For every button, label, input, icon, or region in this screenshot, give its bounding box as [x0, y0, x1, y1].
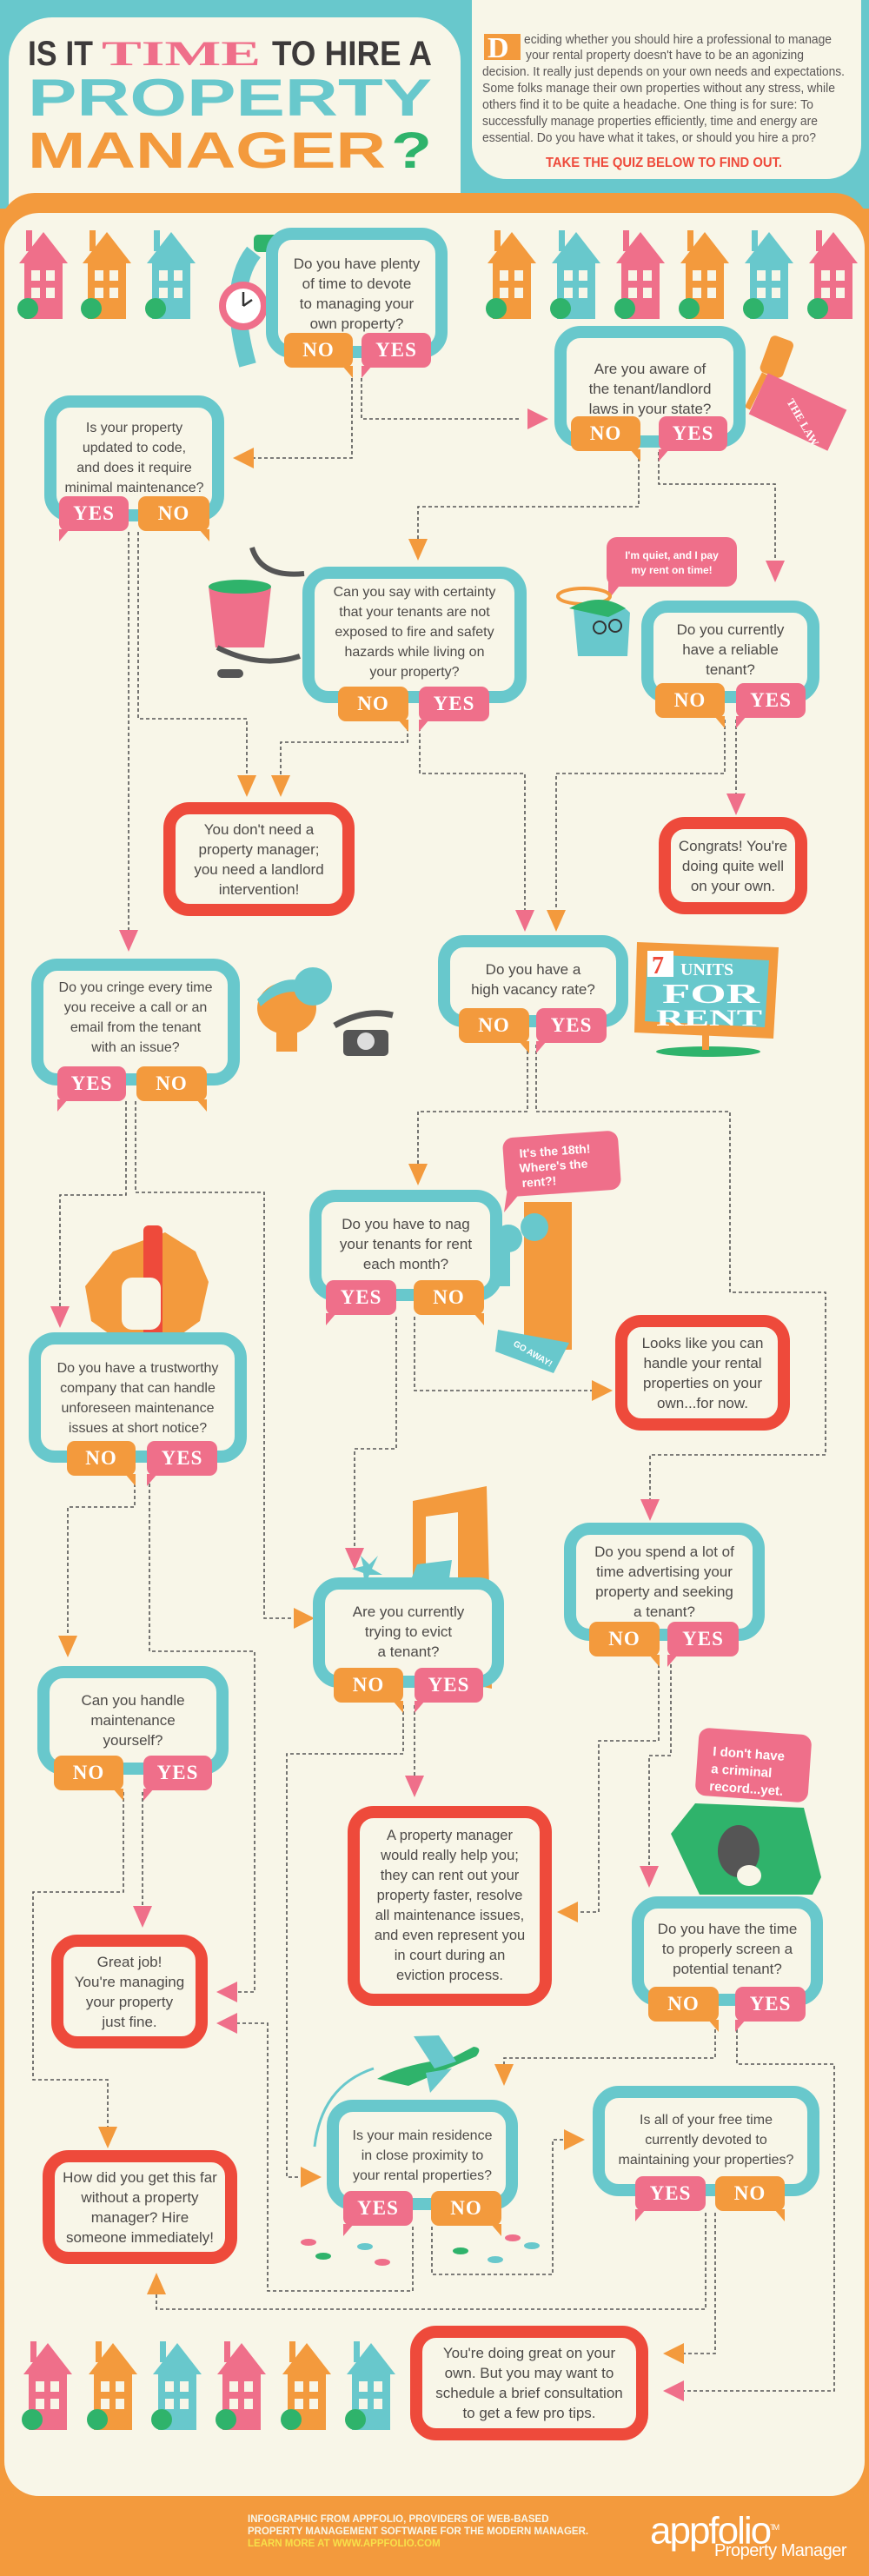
result: hire someone immediately: manager? Hire — [91, 2209, 189, 2225]
question 5 — [641, 601, 819, 703]
question 15: Is all of your free time — [640, 2113, 773, 2128]
question 7 — [438, 935, 628, 1027]
question 1: Do you have plenty — [294, 256, 420, 272]
question 1 — [266, 228, 448, 358]
question 4: Can you say with certainty — [334, 585, 495, 600]
question 2: Are you aware of — [594, 361, 706, 377]
intro text: D — [488, 32, 509, 64]
title: MANAGER — [28, 123, 386, 179]
Q8 buttons: NO — [433, 1286, 465, 1308]
result: great job: just fine. — [102, 2013, 157, 2030]
question 7: Do you have a — [486, 961, 580, 978]
icon: worried lady with phone — [257, 967, 393, 1056]
question 15: maintaining your properties? — [619, 2153, 793, 2168]
intro text: TAKE THE QUIZ BELOW TO FIND OUT. — [546, 156, 782, 170]
question 14 — [327, 2100, 518, 2210]
result: handle on your own for now: Looks like you can — [642, 1335, 763, 1351]
result: doing great, consult pro: own. But you may want to — [445, 2365, 614, 2381]
question 5: Do you currently — [677, 621, 784, 638]
title: PROPERTY — [28, 69, 432, 127]
Q12 buttons — [54, 1756, 212, 1801]
Q6 buttons — [57, 1066, 207, 1112]
title: TO HIRE A — [272, 35, 432, 73]
question 11 — [564, 1523, 765, 1641]
result: congrats: Congrats! You're — [679, 838, 787, 853]
intro text: others find it to be quite a headache. One thing is for sure: To — [482, 97, 813, 112]
Q6 buttons: YES — [71, 1072, 112, 1094]
Q1 buttons: NO — [302, 339, 335, 361]
question 1: of time to devote — [302, 276, 411, 292]
question 4: exposed to fire and safety — [335, 625, 494, 640]
question 15: currently devoted to — [645, 2133, 767, 2148]
question 7: high vacancy rate? — [471, 981, 595, 998]
Q10 buttons: YES — [428, 1674, 469, 1696]
icon: footprints — [301, 2234, 540, 2266]
Q4 buttons — [338, 687, 489, 732]
Q12 buttons: YES — [157, 1762, 198, 1783]
question 2 — [554, 326, 746, 448]
icon: man with bomb and speech bubble: record...yet. — [709, 1779, 784, 1799]
result: hire someone immediately: without a property — [81, 2188, 199, 2206]
result: congrats — [659, 817, 807, 914]
question 10: Are you currently — [353, 1603, 464, 1620]
result: hire someone immediately: someone immediately! — [66, 2228, 214, 2246]
icon: 7 units for rent sign: FOR — [662, 978, 760, 1009]
question 6 — [31, 959, 240, 1086]
question 8: your tenants for rent — [340, 1236, 472, 1252]
result: property manager would help: A property manager — [387, 1828, 513, 1843]
footer credits: LEARN MORE AT WWW.APPFOLIO.COM — [248, 2539, 441, 2549]
Q3 buttons: YES — [73, 502, 115, 524]
question 11: Do you spend a lot of — [594, 1544, 734, 1560]
question 9: unforeseen maintenance — [61, 1401, 215, 1416]
question 1: to managing your — [300, 295, 414, 312]
icon: door with fists and speech bubble: GO AWAY! — [511, 1339, 554, 1370]
question 4: that your tenants are not — [339, 605, 490, 620]
question 5: tenant? — [706, 661, 755, 678]
result: handle on your own for now: own...for now. — [657, 1394, 748, 1411]
Q9 buttons: YES — [162, 1447, 202, 1469]
result: property manager would help: and even represent you — [375, 1928, 525, 1943]
question 9 — [29, 1332, 247, 1463]
question 15 — [593, 2086, 819, 2196]
question 9: company that can handle — [60, 1381, 216, 1396]
question 11: property and seeking — [595, 1583, 733, 1600]
question 4 — [302, 567, 527, 703]
Q12 buttons: NO — [73, 1762, 104, 1783]
houses: top left — [17, 230, 196, 319]
question 3: and does it require — [76, 461, 192, 475]
question 2: laws in your state? — [589, 401, 711, 417]
icon: gavel and law book: THE LAW — [784, 396, 822, 448]
icon: angel tenant with speech bubble: my rent on time! — [631, 564, 713, 576]
intro text: successfully manage properties efficiently, time and energy are — [482, 114, 818, 129]
Q3 buttons — [59, 496, 209, 541]
Q14 buttons — [343, 2191, 501, 2236]
Q10 buttons — [334, 1668, 483, 1713]
result: property manager would help: property faster, resolve — [377, 1888, 522, 1903]
Q15 buttons: YES — [650, 2182, 691, 2204]
intro text: eciding whether you should hire a professional to manage — [524, 32, 832, 47]
Q9 buttons — [67, 1441, 217, 1486]
question 13: to properly screen a — [662, 1941, 793, 1957]
footer credits: INFOGRAPHIC FROM APPFOLIO, PROVIDERS OF WEB-BASED — [248, 2514, 549, 2525]
Q5 buttons: YES — [750, 689, 792, 711]
footer logo: appfolioTM — [650, 2510, 778, 2553]
intro panel — [472, 0, 861, 179]
result: great job: Great job! — [97, 1954, 162, 1969]
result: landlord intervention — [163, 802, 355, 916]
icon: watch — [219, 235, 280, 365]
houses: bottom — [22, 2341, 395, 2430]
result: property manager would help: in court during an — [395, 1948, 505, 1963]
Q15 buttons: NO — [734, 2182, 766, 2204]
icon: man with bomb and speech bubble — [671, 1728, 821, 1895]
result: doing great, consult pro: to get a few pro tips. — [462, 2405, 596, 2421]
Q11 buttons — [589, 1622, 739, 1667]
Q4 buttons: YES — [434, 693, 474, 714]
Q2 buttons: YES — [673, 422, 713, 444]
footer logo: Property Manager — [714, 2541, 846, 2560]
icon: airplane — [315, 2035, 479, 2147]
title: IS IT — [28, 35, 93, 73]
question 8: each month? — [363, 1256, 448, 1272]
dashed connectors — [33, 378, 834, 2391]
icon: 7 units for rent sign: 7 — [652, 953, 664, 979]
title — [28, 34, 432, 179]
Q15 buttons — [635, 2176, 785, 2221]
footer credits: PROPERTY MANAGEMENT SOFTWARE FOR THE MODERN MANAGER. — [248, 2526, 588, 2537]
question 3: minimal maintenance? — [64, 481, 204, 495]
question 13: Do you have the time — [658, 1921, 797, 1937]
arrows — [50, 408, 785, 2401]
icon: door with fists and speech bubble: rent?! — [521, 1173, 557, 1190]
result: handle on your own for now: properties on your — [643, 1375, 762, 1391]
result: great job: You're managing — [75, 1973, 184, 1990]
result: property manager would help: they can rent out your — [381, 1868, 519, 1883]
Q7 buttons: NO — [478, 1014, 510, 1036]
icon: 7 units for rent sign: UNITS — [680, 960, 733, 979]
question 12: yourself? — [103, 1732, 163, 1749]
question 3: updated to code, — [83, 441, 186, 455]
result: handle on your own for now: handle your rental — [643, 1354, 762, 1371]
Q6 buttons: NO — [156, 1072, 188, 1094]
intro text: essential. Do you have what it takes, or should you hire a pro? — [482, 130, 816, 145]
question 8: Do you have to nag — [342, 1216, 470, 1232]
question 13 — [632, 1896, 823, 2006]
Q1 buttons: YES — [375, 339, 417, 361]
question 1: own property? — [310, 315, 403, 332]
result: landlord intervention: You don't need a — [204, 820, 314, 838]
Q3 buttons: NO — [158, 502, 189, 524]
question 2: the tenant/landlord — [589, 381, 711, 397]
question 10: a tenant? — [378, 1643, 439, 1660]
question 10 — [313, 1577, 504, 1688]
icon: door with fists and speech bubble: It's the 18th! — [519, 1141, 591, 1160]
question 4: hazards while living on — [344, 645, 484, 660]
Q13 buttons: NO — [667, 1993, 700, 2015]
intro text: your rental property doesn't have to be an agonizing — [526, 48, 804, 63]
question 14: your rental properties? — [353, 2168, 492, 2183]
Q4 buttons: NO — [357, 693, 389, 714]
question 3: Is your property — [86, 421, 182, 435]
question 6: email from the tenant — [70, 1020, 201, 1035]
question 4: your property? — [369, 665, 460, 680]
icon: angel tenant with speech bubble: I'm quiet, and I pay — [625, 549, 719, 561]
icon: trash can with wires — [209, 548, 304, 678]
Q14 buttons: NO — [450, 2197, 482, 2219]
result: congrats: on your own. — [691, 878, 775, 893]
Q1 buttons — [284, 333, 431, 378]
Q2 buttons: NO — [590, 422, 621, 444]
Q7 buttons — [459, 1008, 607, 1053]
icon: door with fists and speech bubble — [494, 1130, 621, 1373]
result: hire someone immediately — [43, 2150, 237, 2264]
result: doing great, consult pro: You're doing great on your — [443, 2345, 615, 2361]
question 10: trying to evict — [365, 1623, 452, 1640]
houses: top right — [486, 230, 858, 319]
Q8 buttons: YES — [341, 1286, 381, 1308]
intro text — [482, 32, 845, 170]
result: great job — [51, 1935, 208, 2048]
icon: door with fists and speech bubble: Where's the — [519, 1157, 588, 1175]
question 12: maintenance — [90, 1712, 176, 1729]
header background — [0, 0, 869, 209]
intro text: Some folks manage their own properties without any stress, while — [482, 81, 835, 96]
footer credits — [248, 2514, 588, 2549]
question 5: have a reliable — [682, 641, 779, 658]
title: ? — [391, 123, 432, 179]
result: landlord intervention: property manager; — [199, 841, 319, 857]
Q2 buttons — [571, 416, 727, 461]
result: hire someone immediately: How did you get this far — [63, 2169, 217, 2185]
icon: man with bomb and speech bubble: I don't have — [713, 1744, 785, 1764]
result: landlord intervention: you need a landlord — [194, 860, 324, 878]
icon: 7 units for rent sign — [634, 942, 779, 1057]
result: property manager would help: all maintenance issues, — [375, 1908, 524, 1923]
question 12: Can you handle — [81, 1692, 185, 1709]
Q11 buttons: NO — [608, 1628, 640, 1650]
Q5 buttons: NO — [674, 689, 706, 711]
result: doing great, consult pro: schedule a brief consultation — [435, 2385, 623, 2401]
question 11: a tenant? — [634, 1603, 695, 1620]
result: congrats: doing quite well — [682, 857, 784, 874]
title: TIME — [102, 34, 261, 73]
question 8 — [309, 1190, 502, 1301]
icon: leg kicking out of door — [352, 1486, 492, 1689]
Q5 buttons — [655, 683, 806, 728]
question 3 — [44, 395, 224, 521]
result: handle on your own for now — [615, 1315, 790, 1431]
icon: gavel and law book — [747, 335, 846, 451]
question 9: Do you have a trustworthy — [57, 1361, 218, 1376]
question 14: Is your main residence — [353, 2128, 492, 2143]
Q13 buttons — [648, 1987, 806, 2032]
footer logo — [650, 2510, 846, 2560]
result: property manager would help: would really help you; — [381, 1848, 519, 1863]
title panel — [9, 17, 461, 217]
Q8 buttons — [326, 1280, 484, 1325]
icon: 7 units for rent sign: RENT — [656, 1006, 762, 1031]
question 6: Do you cringe every time — [59, 980, 212, 995]
result: landlord intervention: intervention! — [219, 881, 299, 897]
icon: man with bomb and speech bubble: a criminal — [711, 1762, 773, 1781]
Q10 buttons: NO — [353, 1674, 384, 1696]
question 11: time advertising your — [596, 1564, 733, 1580]
question 14: in close proximity to — [362, 2148, 483, 2163]
question 6: you receive a call or an — [64, 1000, 207, 1015]
question 6: with an issue? — [91, 1040, 180, 1055]
Q13 buttons: YES — [750, 1993, 791, 2015]
Q9 buttons: NO — [85, 1447, 117, 1469]
result: property manager would help: eviction process. — [396, 1968, 503, 1983]
icon: angel tenant with speech bubble — [558, 537, 737, 656]
question 13: potential tenant? — [673, 1961, 782, 1977]
Q14 buttons: YES — [357, 2197, 399, 2219]
result: great job: your property — [86, 1994, 173, 2009]
question 9: issues at short notice? — [69, 1421, 207, 1436]
question 12 — [37, 1666, 229, 1775]
icon: hand with wrench — [85, 1225, 209, 1347]
Q11 buttons: YES — [682, 1628, 724, 1650]
result: doing great, consult pro — [410, 2326, 648, 2440]
Q7 buttons: YES — [551, 1014, 592, 1036]
result: property manager would help — [348, 1806, 552, 2006]
